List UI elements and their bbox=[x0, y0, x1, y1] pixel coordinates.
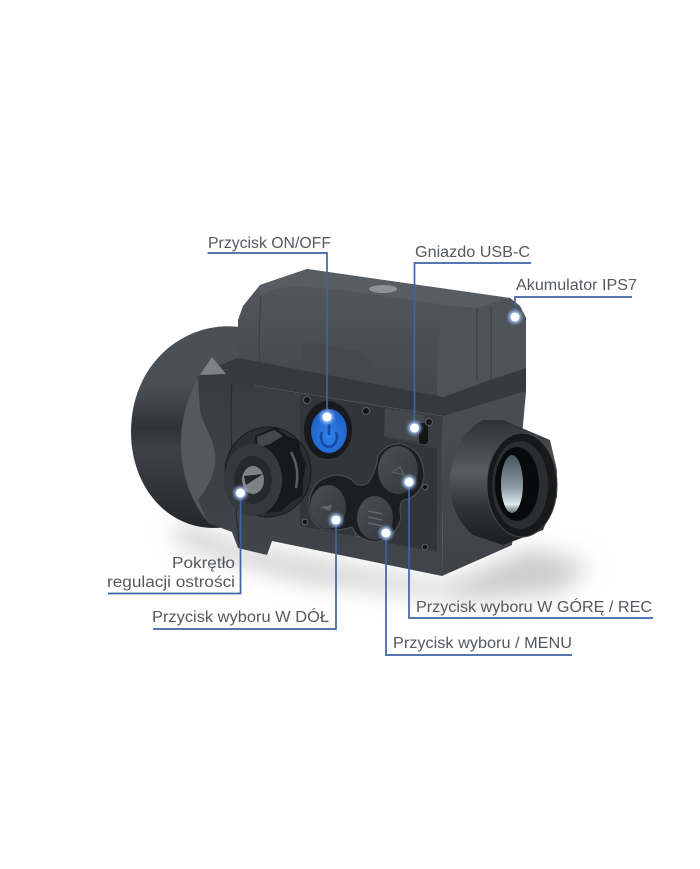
device bbox=[131, 269, 557, 576]
body left seam bbox=[231, 382, 240, 548]
lens inner ring bbox=[492, 441, 548, 529]
power button bbox=[304, 401, 352, 459]
objective hood bbox=[131, 326, 262, 528]
battery top cap bbox=[260, 269, 510, 308]
callout: menu button bbox=[380, 526, 572, 655]
focus dial bbox=[224, 427, 311, 517]
menu button bbox=[357, 496, 393, 540]
callout: ON/OFF button bbox=[208, 235, 334, 424]
callout: focus dial bbox=[107, 486, 247, 594]
callout: up / REC button bbox=[402, 476, 653, 618]
up button bbox=[378, 446, 418, 494]
hood joint highlight bbox=[200, 357, 226, 375]
front panel bbox=[198, 362, 443, 576]
lens outer ring bbox=[487, 433, 557, 537]
callout: USB-C port bbox=[408, 244, 531, 434]
callout: focus dial: regulacji ostrości bbox=[107, 574, 235, 591]
callout: IPS7 battery bbox=[508, 277, 637, 324]
callout: USB-C port: Gniazdo USB-C bbox=[415, 244, 530, 261]
battery edge lines bbox=[259, 296, 491, 380]
lens barrel bbox=[495, 447, 539, 521]
lower battery band bbox=[227, 358, 526, 416]
battery recess bbox=[303, 343, 370, 383]
callout: focus dial: Pokrętło bbox=[172, 555, 235, 572]
battery right end bbox=[437, 298, 526, 400]
battery contact bbox=[369, 285, 397, 293]
lens assembly bbox=[450, 420, 557, 545]
hood inner cone bbox=[181, 360, 245, 524]
callout: IPS7 battery: Akumulator IPS7 bbox=[516, 277, 637, 294]
battery top and front bbox=[238, 269, 526, 398]
button cluster surround bbox=[309, 444, 424, 542]
upper plate bbox=[300, 394, 437, 552]
callout: menu button: Przycisk wyboru / MENU bbox=[393, 635, 572, 652]
body right side bbox=[442, 368, 526, 576]
USB port bbox=[419, 423, 428, 444]
panel screws bbox=[302, 396, 432, 550]
ground shadow bbox=[175, 522, 590, 600]
down button bbox=[310, 485, 346, 529]
lens glass bbox=[501, 455, 523, 513]
callout: down button bbox=[152, 514, 342, 629]
USB cover bbox=[384, 408, 424, 442]
callout: up / REC button: Przycisk wyboru W GÓRĘ / REC bbox=[416, 599, 652, 616]
callout: ON/OFF button: Przycisk ON/OFF bbox=[208, 235, 331, 252]
callout: down button: Przycisk wyboru W DÓŁ bbox=[152, 609, 329, 626]
